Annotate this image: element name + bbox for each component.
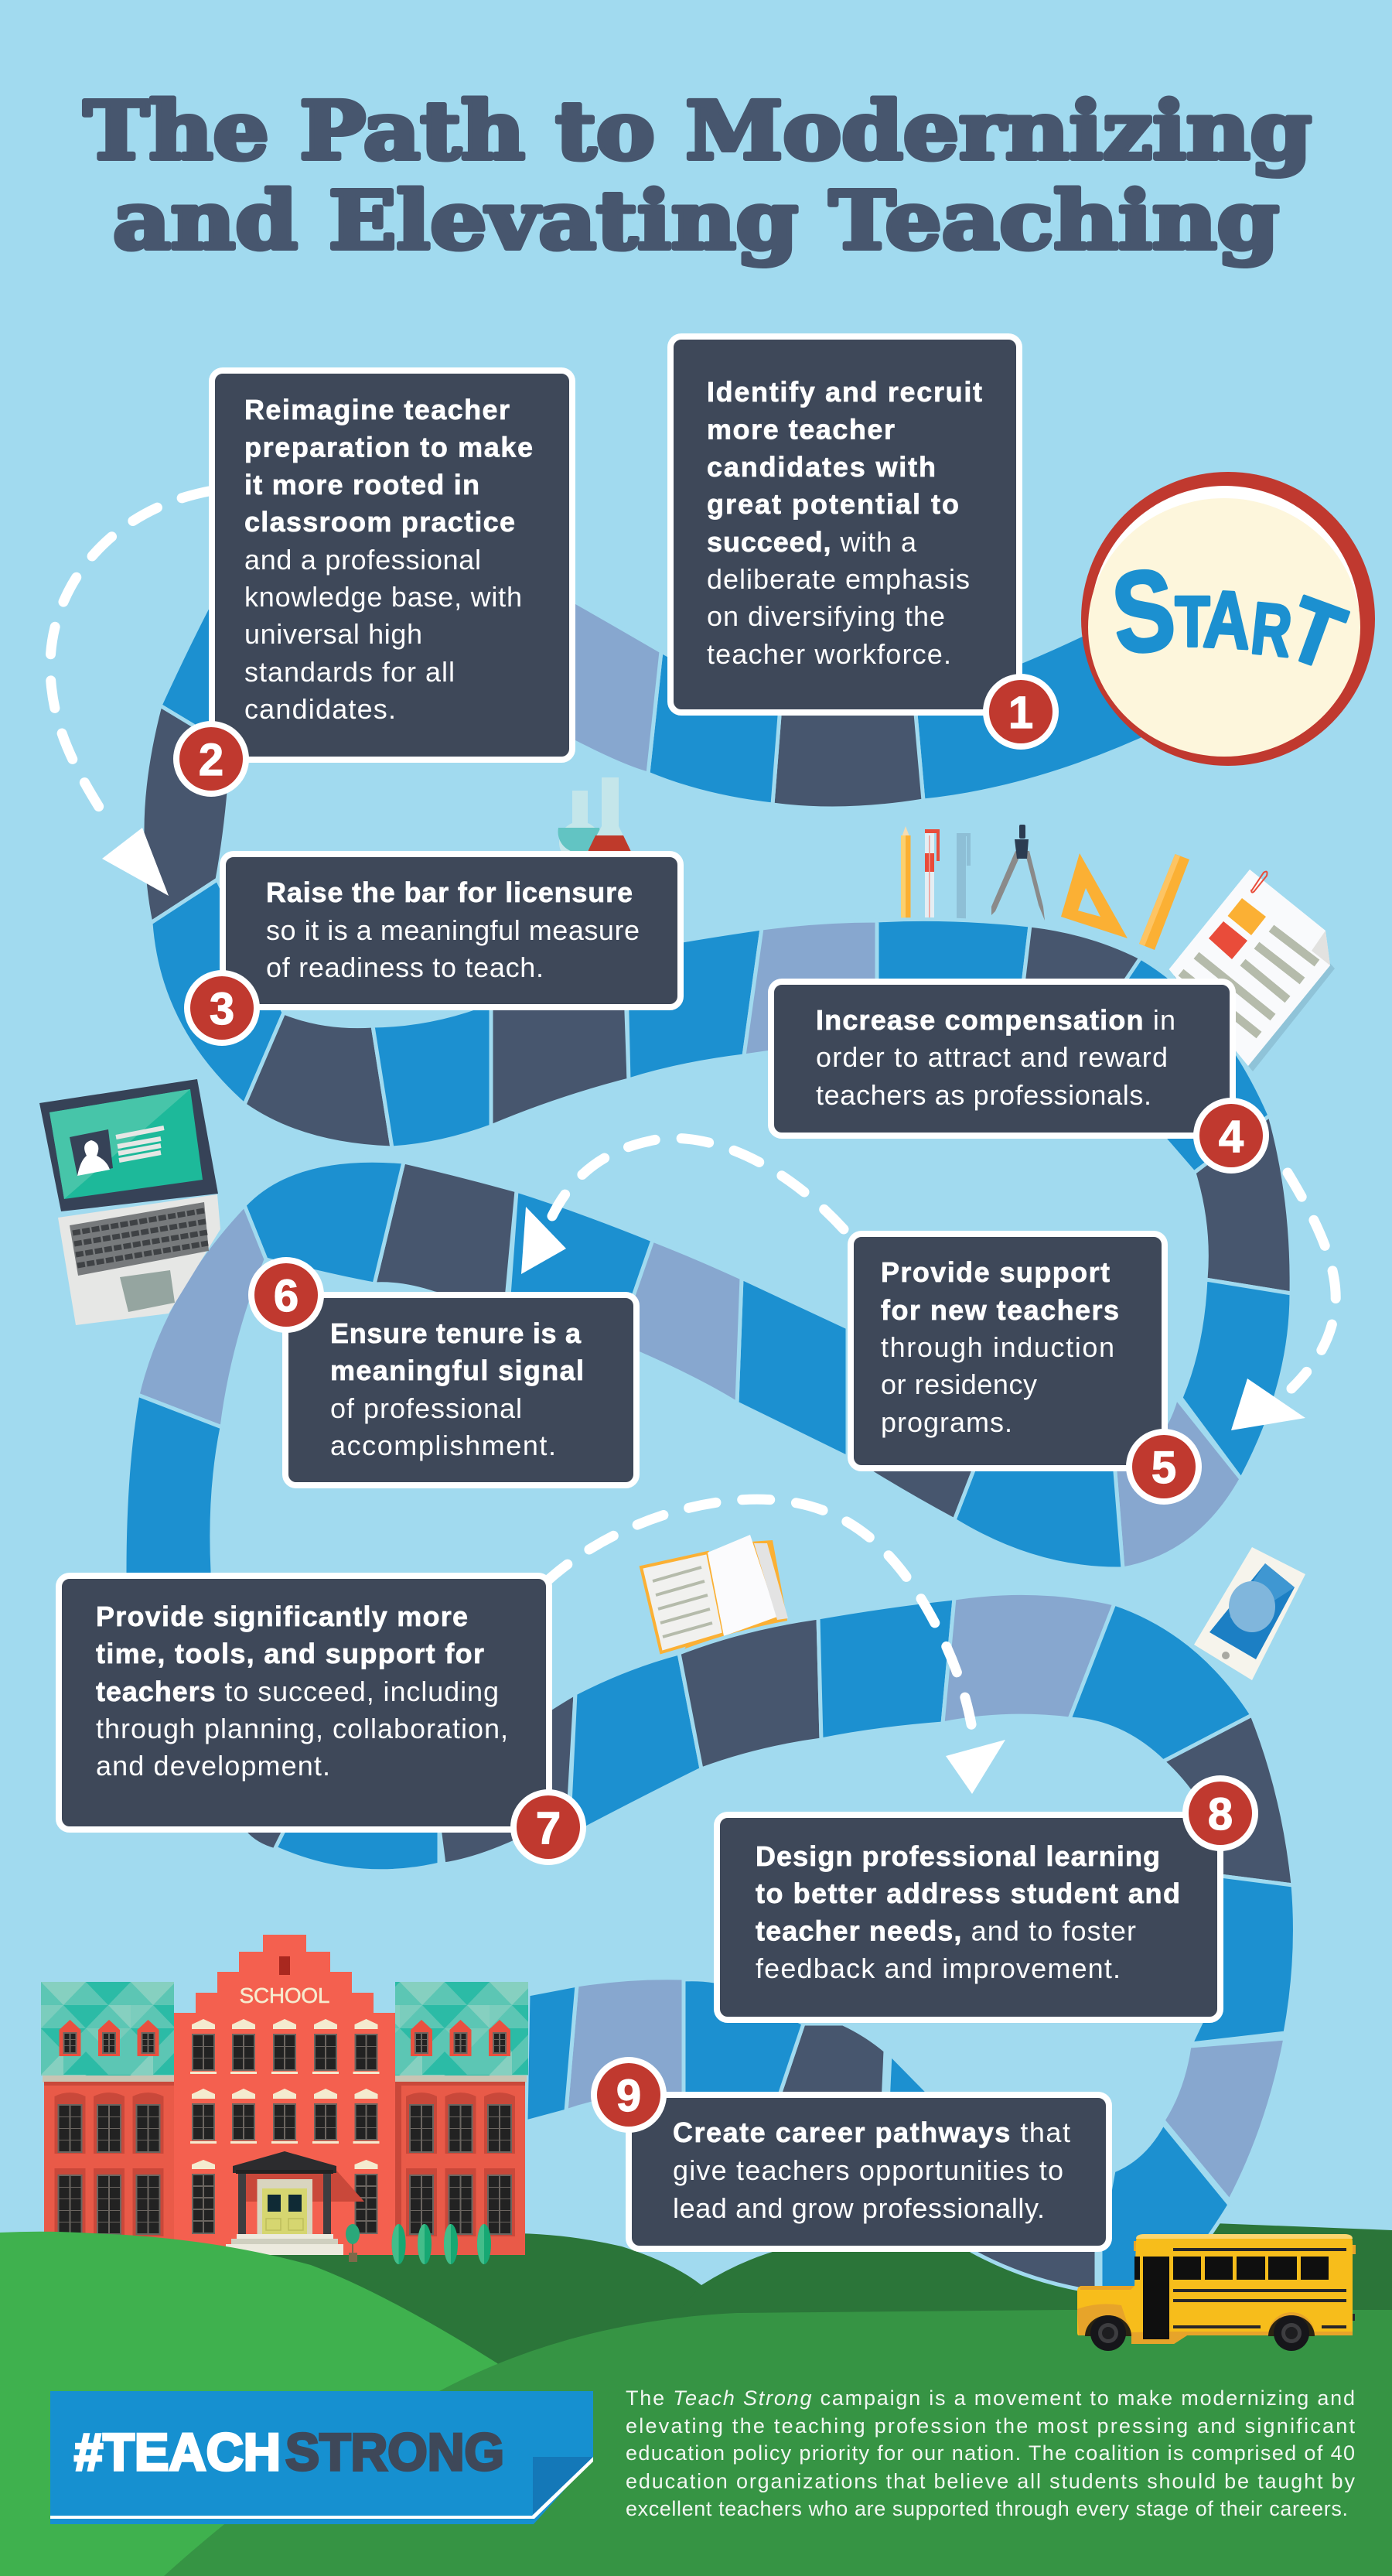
- step number 4: [1193, 1098, 1269, 1174]
- start badge: A: [1202, 574, 1253, 666]
- step 5 card: through induction: [881, 1331, 1114, 1363]
- start badge: T: [1175, 582, 1209, 661]
- step 8 card: [717, 1775, 1258, 2020]
- school building: [41, 1935, 528, 2264]
- step 2 card: [173, 371, 572, 797]
- school entrance: [226, 2151, 364, 2255]
- step 5 card: for new teachers: [881, 1294, 1119, 1326]
- step number 7: 7: [536, 1803, 561, 1853]
- icon: flasks: [558, 777, 633, 863]
- icon: school bus: [1077, 2234, 1356, 2351]
- back hills: [232, 2221, 1392, 2475]
- step number 9: [591, 2057, 667, 2133]
- step 4 card: order to attract and reward: [816, 1041, 1168, 1073]
- step 1 card: Identify and recruit: [707, 376, 982, 408]
- step 2 card: classroom practice: [244, 506, 515, 538]
- footer description: The Teach Strong campaign is a movement to make modernizing and: [626, 2386, 1355, 2410]
- step 7 card: through planning, collaboration,: [96, 1713, 508, 1744]
- step 2 card: Reimagine teacher: [244, 394, 510, 425]
- step number 3: 3: [210, 984, 234, 1034]
- dashed arrow: step 2 to step 3: [50, 491, 209, 896]
- bus stripes: [1173, 2248, 1355, 2328]
- hashtag text: STRONG: [285, 2423, 504, 2482]
- title: [84, 84, 1312, 268]
- school sign: SCHOOL: [240, 1983, 329, 2007]
- step 1 card: succeed, with a: [707, 526, 917, 558]
- step 3 card: of readiness to teach.: [266, 951, 544, 983]
- step 3 card: Raise the bar for licensure: [266, 876, 633, 908]
- step 9 card: Create career pathways that: [673, 2116, 1070, 2148]
- step 2 card: preparation to make: [244, 432, 533, 463]
- step number 5: 5: [1151, 1443, 1176, 1493]
- icons: drafting tools: [901, 825, 1189, 950]
- step 7 card: time, tools, and support for: [96, 1638, 484, 1669]
- light green hill: [0, 2232, 541, 2576]
- step number 8: 8: [1208, 1789, 1233, 1840]
- step 2 card: universal high: [244, 618, 422, 650]
- step 8 card: Design professional learning: [756, 1840, 1160, 1872]
- step number 9: 9: [616, 2071, 641, 2121]
- footer description: education policy priority for our nation. The coalition is comprised of 40: [626, 2441, 1355, 2465]
- step 6 card: meaningful signal: [330, 1355, 584, 1386]
- step 5 card: [851, 1234, 1202, 1505]
- dashed arrow: step 7 to step 8: [546, 1499, 1005, 1794]
- step 1 card: more teacher: [707, 413, 895, 446]
- start badge: R: [1248, 587, 1295, 672]
- footer description: excellent teachers who are supported through every stage of their careers.: [626, 2497, 1348, 2520]
- footer description: elevating the teaching profession the most pressing and significant: [626, 2414, 1355, 2438]
- step 6 card: of professional: [330, 1392, 522, 1424]
- step number 6: 6: [274, 1271, 299, 1321]
- icon: book: [641, 1535, 788, 1655]
- step 1 card: deliberate emphasis: [707, 563, 970, 595]
- bus wheels: [1085, 2312, 1315, 2351]
- step 7 card: Provide significantly more: [96, 1601, 468, 1632]
- icon: pencil: [901, 826, 911, 921]
- step 1 card: candidates with: [707, 451, 936, 483]
- school side wings: [43, 2020, 527, 2255]
- step 3 card: [184, 854, 681, 1046]
- step 5 card: programs.: [881, 1406, 1012, 1438]
- hedge trees: [392, 2224, 491, 2264]
- step 7 card: [59, 1576, 586, 1865]
- step number 6: [248, 1257, 324, 1333]
- footer description: [626, 2386, 1355, 2520]
- bus mirrors: [1134, 2241, 1356, 2254]
- icon: laptop: [39, 1079, 220, 1325]
- hashtag banner: [50, 2391, 593, 2524]
- hashtag text: #TEACH: [74, 2423, 281, 2482]
- step 2 card: and a professional: [244, 544, 481, 576]
- bus body: [1077, 2234, 1353, 2344]
- bus windows: [1173, 2257, 1329, 2280]
- dashed arrow: step 5 to step 6: [521, 1138, 844, 1274]
- start badge: [1081, 472, 1375, 766]
- dashed arrow: step 4 to step 5: [1231, 1173, 1336, 1430]
- step number 7: [510, 1789, 586, 1865]
- step 1 card: [670, 337, 1059, 750]
- school roof wings: [41, 1982, 528, 2075]
- step number 1: [983, 674, 1059, 750]
- step 1 card: great potential to: [707, 488, 959, 520]
- step 6 card: [248, 1257, 636, 1485]
- step 9 card: give teachers opportunities to: [673, 2154, 1063, 2186]
- icon: grey pen: [957, 833, 971, 922]
- step number 3: [184, 970, 260, 1046]
- icon: ruler: [1139, 854, 1189, 950]
- hashtag text: [74, 2423, 504, 2482]
- step number 2: 2: [199, 735, 223, 785]
- road: winding game board path: [125, 542, 1295, 2301]
- step 4 card: [771, 982, 1269, 1174]
- step 5 card: or residency: [881, 1368, 1037, 1400]
- step 3 card: so it is a meaningful measure: [266, 914, 640, 946]
- step 4 card: teachers as professionals.: [816, 1079, 1151, 1111]
- step 2 card: it more rooted in: [244, 469, 479, 501]
- step 6 card: Ensure tenure is a: [330, 1317, 582, 1349]
- step 2 card: knowledge base, with: [244, 581, 522, 613]
- title: and Elevating Teaching: [113, 174, 1279, 268]
- icon: red pen: [925, 829, 940, 921]
- icon: paper with paperclip: [1169, 869, 1335, 1071]
- step number 1: 1: [1008, 688, 1033, 738]
- footer description: education organizations that believe all students should be taught by: [626, 2469, 1355, 2492]
- step 8 card: feedback and improvement.: [756, 1952, 1121, 1984]
- start badge: T: [1275, 578, 1356, 689]
- bus door: [1143, 2257, 1169, 2339]
- step 2 card: candidates.: [244, 693, 396, 725]
- title: The Path to Modernizing: [84, 84, 1312, 178]
- step 7 card: and development.: [96, 1750, 330, 1782]
- start badge: S: [1107, 545, 1181, 678]
- icon: set square: [1061, 853, 1128, 938]
- step 9 card: [591, 2057, 1109, 2249]
- step number 2: [173, 721, 249, 797]
- step number 5: [1126, 1429, 1202, 1505]
- step 9 card: lead and grow professionally.: [673, 2192, 1045, 2224]
- school central windows: [190, 2019, 379, 2234]
- step 5 card: Provide support: [881, 1256, 1110, 1288]
- step 8 card: to better address student and: [756, 1877, 1180, 1909]
- small potted tree: [346, 2224, 360, 2262]
- step 1 card: on diversifying the: [707, 600, 945, 632]
- front green hill: [164, 2310, 1392, 2576]
- step 7 card: teachers to succeed, including: [96, 1676, 499, 1707]
- step 8 card: teacher needs, and to foster: [756, 1915, 1136, 1946]
- step number 8: [1182, 1775, 1258, 1851]
- school central block: [174, 1935, 395, 2255]
- icon: smartphone: [1194, 1547, 1305, 1680]
- step number 4: 4: [1219, 1112, 1244, 1162]
- step 2 card: standards for all: [244, 656, 455, 688]
- step 6 card: accomplishment.: [330, 1430, 556, 1461]
- step 4 card: Increase compensation in: [816, 1004, 1175, 1036]
- icon: compass: [991, 825, 1045, 921]
- step 1 card: teacher workforce.: [707, 638, 951, 670]
